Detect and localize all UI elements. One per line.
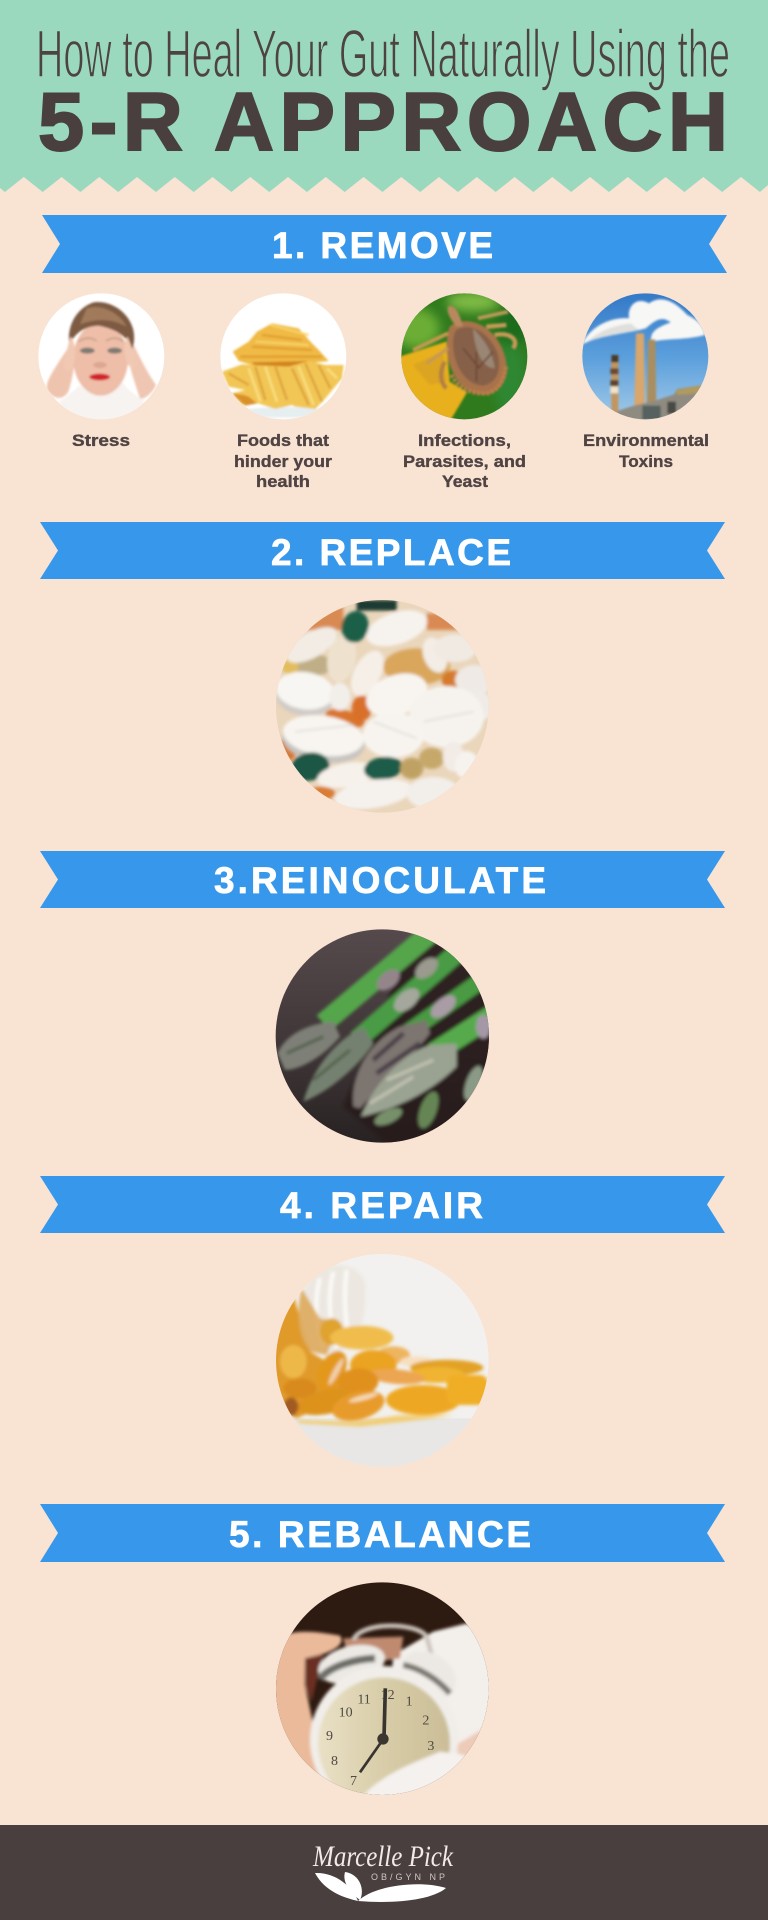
- label: toxins: Toxins: [619, 452, 673, 471]
- label: foods: [234, 431, 332, 491]
- photo: alarm clock: 10: [339, 1706, 353, 1721]
- label: toxins: [583, 431, 709, 471]
- photo: foods: [220, 293, 346, 420]
- photo: alarm clock: 9: [326, 1729, 333, 1744]
- photo: alarm clock: 1: [406, 1695, 413, 1710]
- footer band: [0, 1825, 768, 1920]
- logo: Marcelle Pick: Marcelle Pick: [312, 1840, 454, 1873]
- photo: factory: [582, 293, 708, 420]
- photo: softgels: [276, 1254, 488, 1467]
- label: foods: hinder your: [234, 452, 332, 471]
- banner: 2. REPLACE: 2. REPLACE: [271, 532, 511, 573]
- photo: alarm clock: 8: [331, 1754, 338, 1769]
- label: infections: Yeast: [442, 472, 488, 491]
- title: 5-R APPROACH: [38, 75, 728, 168]
- banner: 4. REPAIR: 4. REPAIR: [280, 1185, 483, 1226]
- label: foods: Foods that: [237, 431, 329, 450]
- photo: tick: [401, 293, 528, 420]
- banner: 4. REPAIR: [40, 1176, 725, 1233]
- logo: Marcelle Pick: [312, 1840, 454, 1902]
- photo: alarm clock: 7: [350, 1774, 357, 1789]
- label: infections: Infections,: [418, 431, 511, 450]
- label: toxins: Environmental: [583, 431, 709, 450]
- photo: alarm clock: 2: [422, 1713, 429, 1728]
- banner: 2. REPLACE: [40, 522, 725, 579]
- icon: leaves: [315, 1872, 446, 1902]
- banner: 3.REINOCULATE: [40, 851, 725, 908]
- label: infections: Parasites, and: [403, 452, 526, 471]
- photo: alarm clock: 11: [357, 1692, 371, 1707]
- banner: 1. REMOVE: 1. REMOVE: [272, 225, 493, 266]
- banner: 5. REBALANCE: [40, 1504, 725, 1562]
- photo: asparagus: [276, 929, 489, 1143]
- banner: 5. REBALANCE: 5. REBALANCE: [229, 1514, 531, 1555]
- title: [36, 16, 730, 168]
- photo: stress: [38, 293, 164, 420]
- label: foods: health: [256, 472, 310, 491]
- label: infections: [403, 431, 526, 491]
- banner: 3.REINOCULATE: 3.REINOCULATE: [214, 860, 546, 901]
- header band: [0, 0, 768, 192]
- photo: pills: [276, 600, 488, 812]
- banner: 1. REMOVE: [42, 215, 727, 273]
- photo: alarm clock: 3: [427, 1739, 434, 1754]
- photo: alarm clock: 12: [381, 1688, 395, 1703]
- logo: Marcelle Pick: OB/GYN NP: [371, 1872, 445, 1882]
- label: stress: Stress: [72, 431, 130, 450]
- photo: alarm clock: [276, 1582, 489, 1795]
